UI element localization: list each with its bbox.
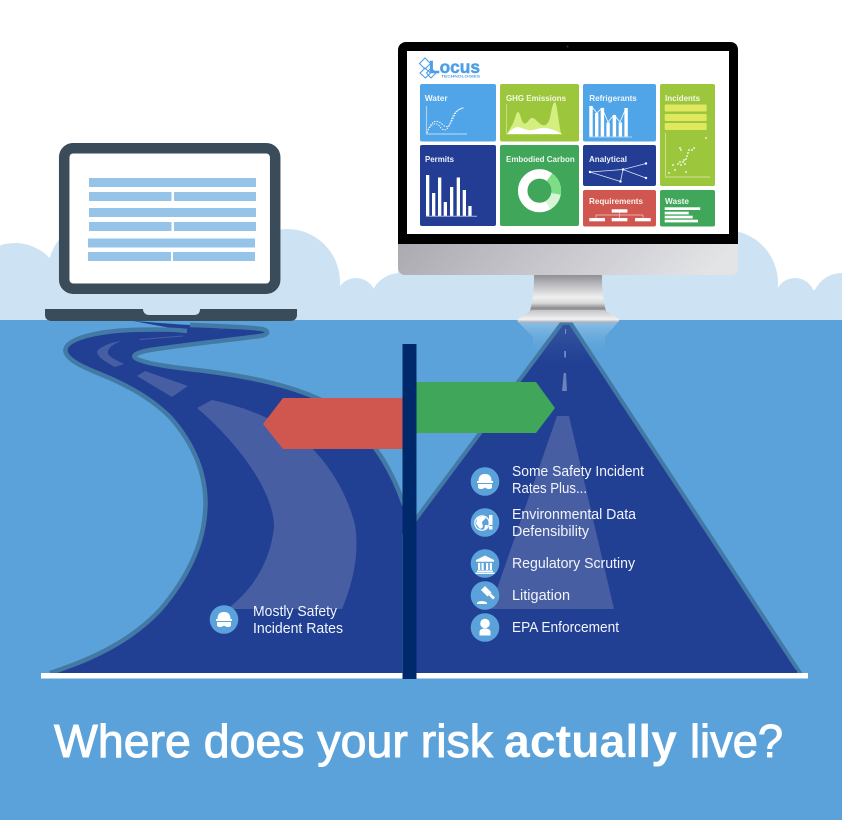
tile: embodied carbon: Embodied Carbon <box>506 154 575 164</box>
tile: analytical: Analytical <box>589 154 627 164</box>
icon: helmet left <box>210 605 238 634</box>
tile: requirements <box>583 190 656 226</box>
monitor <box>398 42 738 275</box>
title: Where does your risk <box>54 715 494 767</box>
tile: GHG emissions: GHG Emissions <box>506 93 566 103</box>
icon: bank <box>471 549 499 578</box>
icon: globe <box>471 508 499 537</box>
tile: water: Water <box>425 93 448 103</box>
road dashes left <box>97 326 357 609</box>
water background <box>0 320 842 820</box>
road edge lines <box>50 325 404 673</box>
tile: waste: Waste <box>665 196 689 206</box>
text: mostly safety <box>253 604 343 637</box>
Locus logo: Locus <box>429 57 480 77</box>
monitor stand <box>518 275 619 322</box>
tile: incidents: Incidents <box>665 93 700 103</box>
tile: permits <box>420 145 496 226</box>
signpost <box>402 344 416 679</box>
text: right road risk list: Some Safety Incident <box>512 464 644 480</box>
ground line <box>41 673 808 678</box>
tile: water <box>420 84 496 142</box>
text: mostly safety: Mostly Safety <box>253 604 338 620</box>
tile: waste <box>660 190 715 226</box>
text: right road risk list: Rates Plus... <box>512 481 587 497</box>
title: live? <box>690 715 783 767</box>
icon: helmet right <box>471 467 499 496</box>
sign: red arrow <box>263 398 403 449</box>
tile: refrigerants <box>583 84 656 142</box>
title <box>54 715 783 767</box>
text: right road risk list: Environmental Data <box>512 507 637 523</box>
text: right road risk list <box>512 464 644 636</box>
sign: green arrow <box>416 382 555 433</box>
text: right road risk list: Litigation <box>512 588 570 604</box>
laptop <box>45 148 297 321</box>
tile: refrigerants: Refrigerants <box>589 93 637 103</box>
text: right road risk list: Regulatory Scrutiny <box>512 556 636 572</box>
tile: requirements: Requirements <box>589 196 643 206</box>
laptop screen rows <box>88 178 256 261</box>
tile: embodied carbon <box>500 145 579 226</box>
Locus logo: TECHNOLOGIES <box>441 74 481 78</box>
text: mostly safety: Incident Rates <box>253 621 343 637</box>
straight road: wider risk <box>404 323 800 673</box>
winding road: mostly safety incident rates <box>50 321 404 673</box>
tile: permits: Permits <box>425 154 454 164</box>
monitor reflection on water <box>517 321 619 356</box>
tile: incidents <box>660 84 715 186</box>
text: right road risk list: EPA Enforcement <box>512 620 619 636</box>
title: actually <box>504 715 677 767</box>
road dashes right <box>490 329 614 609</box>
icon: gavel <box>471 581 499 610</box>
tile: GHG emissions <box>500 84 579 142</box>
clouds <box>0 217 842 337</box>
text: right road risk list: Defensibility <box>512 524 590 540</box>
tile: analytical <box>583 145 656 186</box>
icon: person <box>471 613 499 642</box>
